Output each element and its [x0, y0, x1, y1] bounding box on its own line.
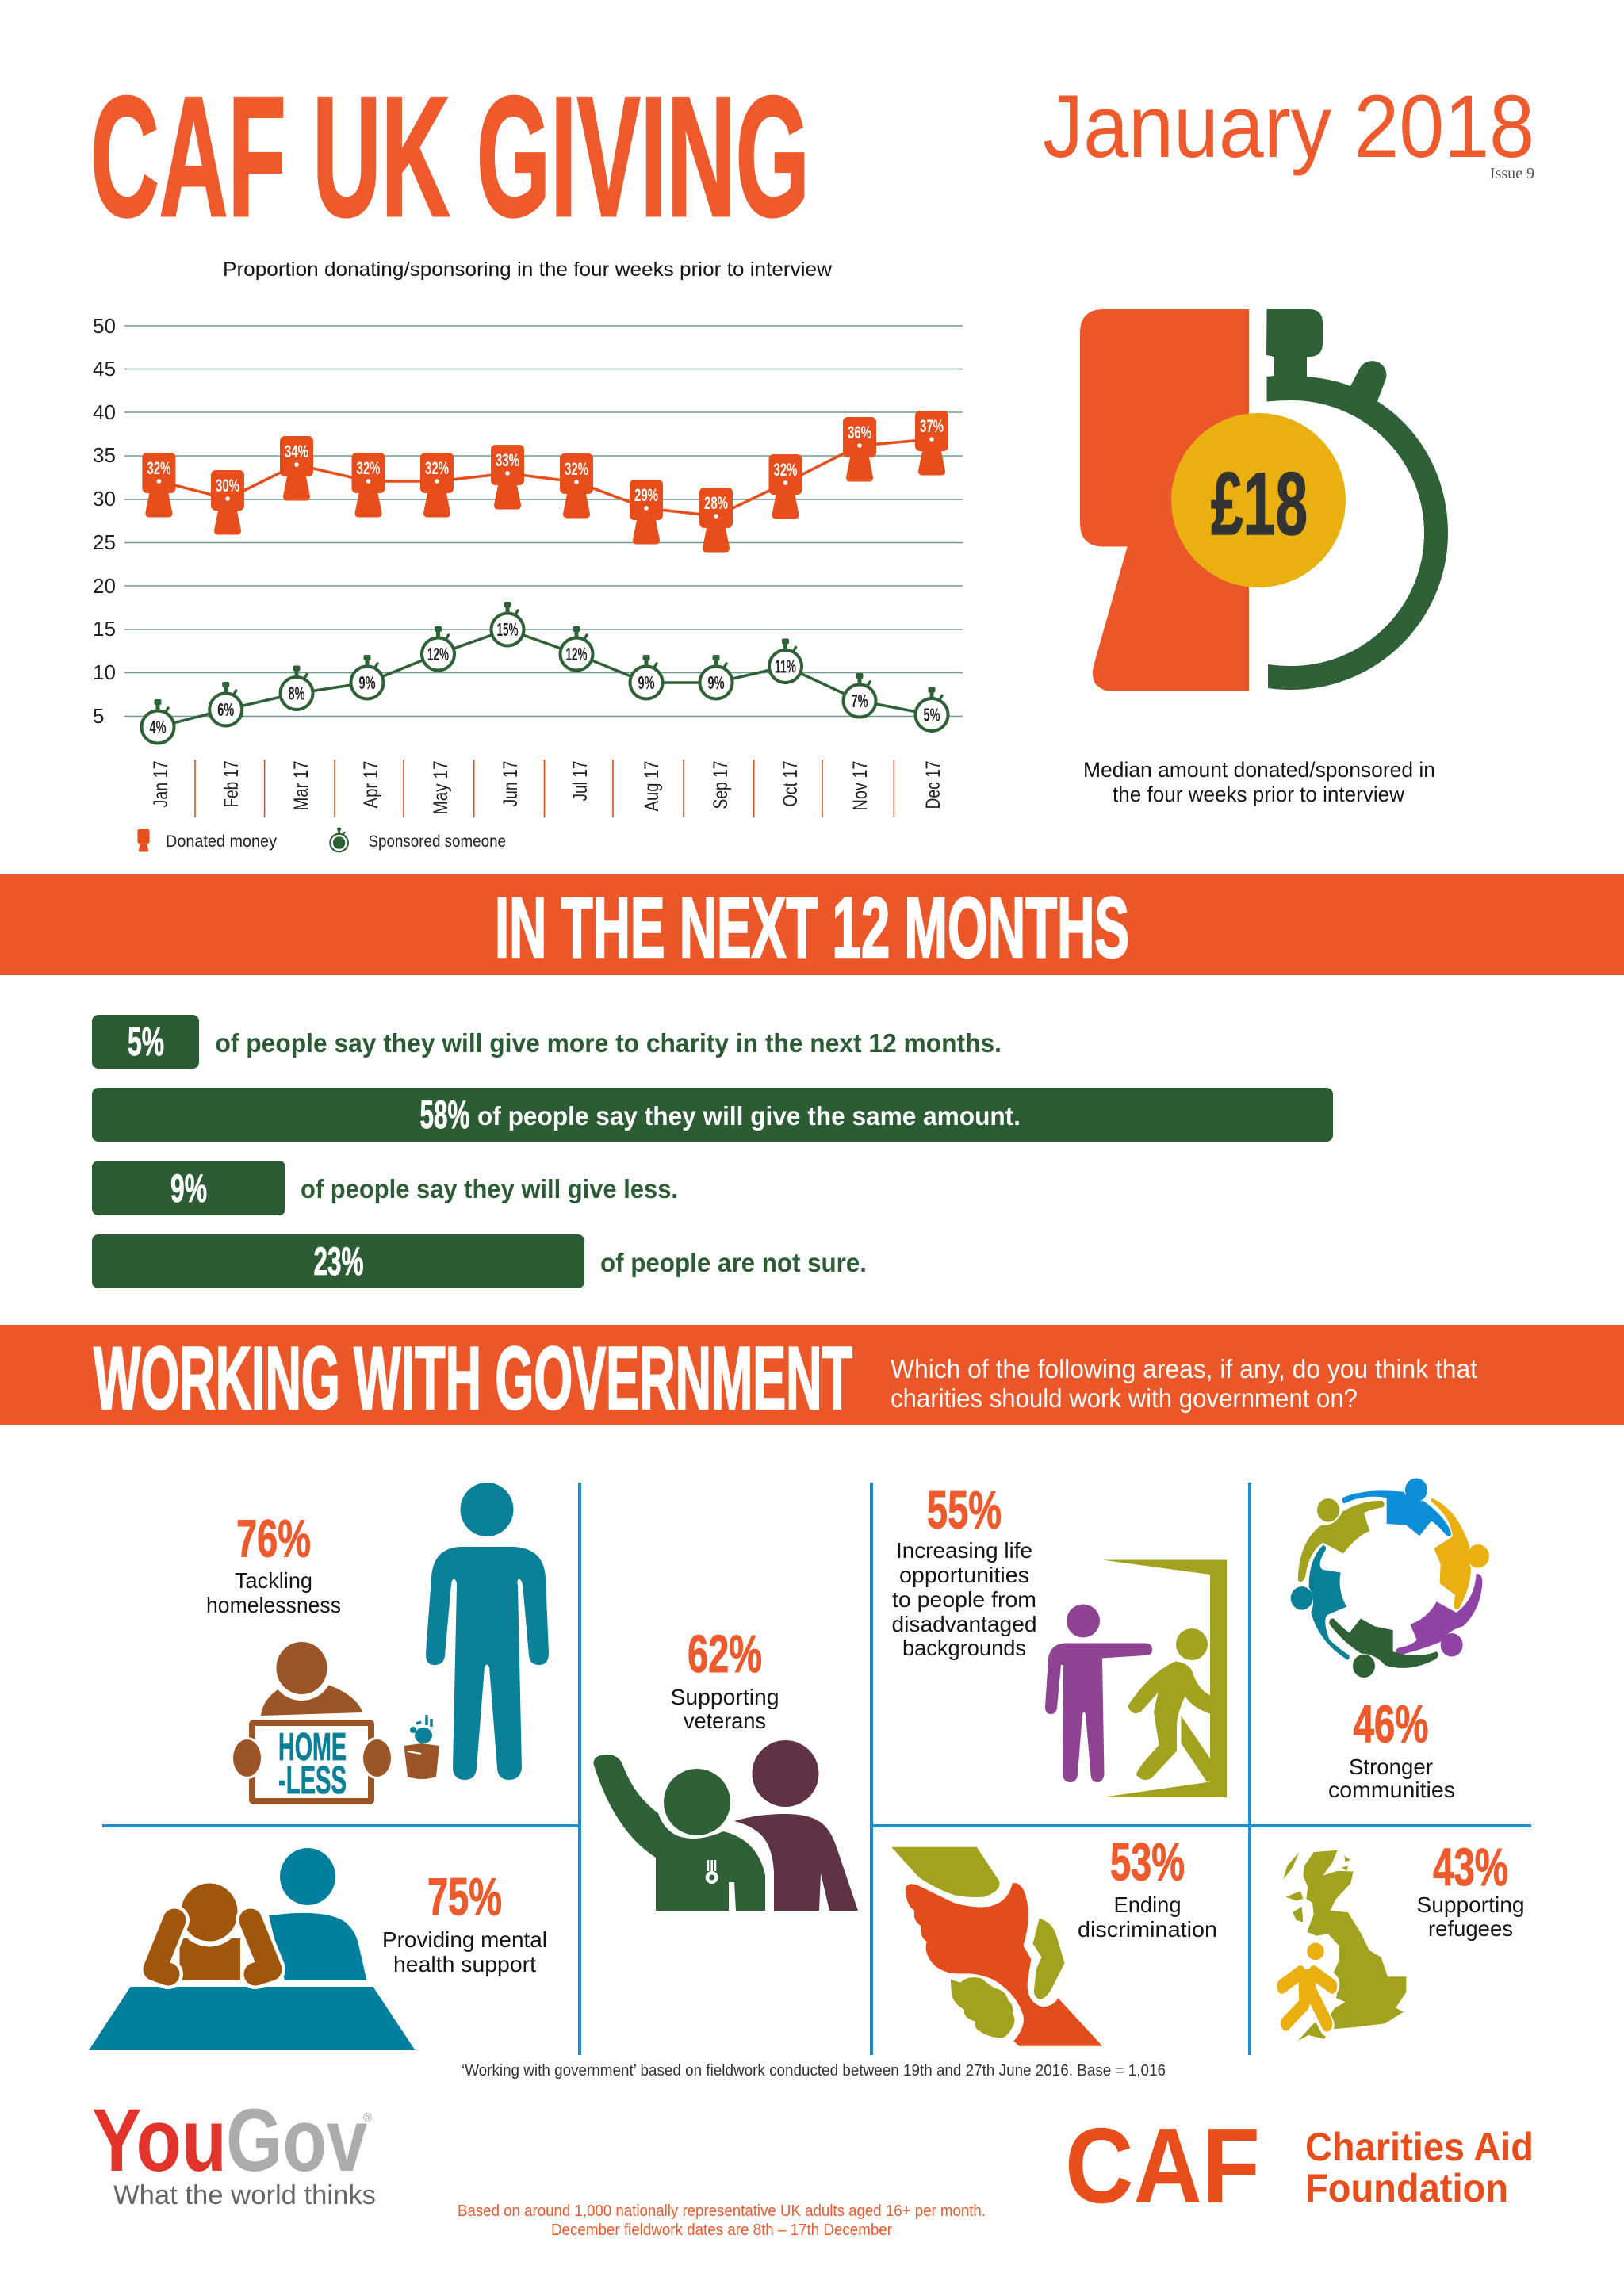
- donated markers: 30%: [216, 476, 239, 496]
- y axis labels: 10: [93, 660, 116, 684]
- label: stronger communities: [1328, 1755, 1455, 1802]
- banner: in the next 12 months: IN THE NEXT 12 MONTHS: [495, 879, 1129, 975]
- stat: 75 percent: 75%: [427, 1868, 502, 1927]
- sample note: December fieldwork dates are 8th – 17th December: [551, 2221, 892, 2239]
- icon: community ring: [1291, 1479, 1489, 1678]
- donated money line: [159, 439, 932, 516]
- stat: 55 percent: 55%: [927, 1481, 1002, 1540]
- logo: CAF: Charities Aid: [1305, 2125, 1534, 2169]
- stat: 43 percent: 43%: [1433, 1838, 1508, 1897]
- month separators and labels: Apr 17: [360, 761, 382, 809]
- bar: 5 percent give more: 5%: [128, 1020, 164, 1064]
- label: increasing life opportunities: disadvantaged: [891, 1612, 1037, 1636]
- label: providing mental health support: [382, 1927, 547, 1976]
- median caption: [1083, 758, 1435, 806]
- bar: 5 percent give more: [92, 1015, 1002, 1069]
- bar: 23 percent not sure: of people are not sure.: [600, 1248, 867, 1277]
- banner: in the next 12 months: [0, 874, 1624, 975]
- banner question: charities should work with government on?: [891, 1383, 1358, 1413]
- sponsored line: [158, 629, 932, 727]
- label: providing mental health support: Providing mental: [382, 1927, 547, 1952]
- donated markers: 36%: [848, 423, 871, 442]
- label: increasing life opportunities: Increasing life: [896, 1538, 1032, 1563]
- icon: homeless person with sign: HOME: [278, 1726, 347, 1769]
- label: supporting veterans: veterans: [684, 1709, 766, 1733]
- sponsored markers: 12%: [566, 644, 587, 664]
- month separators and labels: Jun 17: [500, 761, 522, 807]
- median caption: the four weeks prior to interview: [1113, 783, 1404, 806]
- y axis labels: 20: [93, 574, 116, 598]
- icon: two people at table: [89, 1848, 416, 2050]
- label: supporting refugees: [1416, 1892, 1524, 1941]
- issue number: Issue 9: [1490, 165, 1534, 182]
- sponsored markers: 9%: [707, 672, 725, 693]
- label: increasing life opportunities: opportunities: [899, 1563, 1029, 1587]
- icon: begging cup: [404, 1715, 439, 1779]
- month separators and labels: May 17: [430, 761, 452, 815]
- y axis labels: 5: [93, 704, 104, 728]
- label: supporting refugees: Supporting: [1416, 1892, 1524, 1917]
- sponsored markers: 11%: [775, 656, 796, 677]
- label: tackling homelessness: homelessness: [206, 1593, 341, 1617]
- banner: working with government: WORKING WITH GOVERNMENT: [94, 1329, 852, 1428]
- logo: YouGov: [92, 2091, 376, 2210]
- sponsored markers: [141, 602, 948, 744]
- panel: mental health: [89, 1848, 547, 2050]
- donated markers: 37%: [920, 416, 944, 436]
- donated markers: 32%: [774, 460, 797, 480]
- icon: UK map with person: [1282, 1850, 1406, 2041]
- icon: homeless person with sign: [232, 1639, 392, 1802]
- label: tackling homelessness: Tackling: [235, 1568, 312, 1593]
- panel: veterans: [593, 1624, 858, 1911]
- label: ending discrimination: [1078, 1892, 1217, 1942]
- label: tackling homelessness: [206, 1568, 341, 1617]
- y axis labels: [93, 314, 116, 728]
- sponsored markers: 6%: [217, 699, 234, 720]
- fieldwork note: ‘Working with government’ based on fieldwork conducted between 19th and 27th June 2016. Base = 1,016: [462, 2062, 1166, 2080]
- icon: standing person: [426, 1483, 549, 1780]
- chart heading: Proportion donating/sponsoring in the four weeks prior to interview: [223, 258, 833, 281]
- bar: 9 percent less: [92, 1161, 678, 1215]
- sponsored markers: 4%: [149, 717, 167, 737]
- sponsored markers: 5%: [923, 704, 940, 725]
- icon: homeless person with sign: -LESS: [278, 1759, 347, 1802]
- donated markers: 32%: [425, 458, 449, 478]
- sample note: [458, 2202, 986, 2239]
- y axis labels: 35: [93, 443, 116, 467]
- stat: 53 percent: 53%: [1110, 1833, 1185, 1892]
- banner question: [891, 1354, 1477, 1413]
- logo: YouGov: Gov: [226, 2091, 367, 2190]
- banner question: Which of the following areas, if any, do you think that: [891, 1354, 1477, 1383]
- panel: homelessness: [206, 1483, 549, 1802]
- label: supporting veterans: [671, 1685, 779, 1733]
- sponsored markers: 9%: [638, 672, 655, 693]
- label: stronger communities: Stronger: [1349, 1755, 1433, 1779]
- donated markers: 28%: [704, 493, 728, 513]
- stat: 76 percent: 76%: [236, 1510, 311, 1568]
- label: supporting refugees: refugees: [1428, 1916, 1513, 1941]
- y axis labels: 30: [93, 487, 116, 511]
- label: increasing life opportunities: backgrounds: [902, 1636, 1026, 1660]
- label: providing mental health support: health support: [393, 1952, 536, 1976]
- sponsored markers: 12%: [427, 644, 449, 664]
- sponsored markers: 8%: [289, 683, 304, 704]
- sample note: Based on around 1,000 nationally representative UK adults aged 16+ per month.: [458, 2202, 986, 2220]
- stat: 46 percent: 46%: [1353, 1695, 1429, 1754]
- donated markers: 32%: [357, 458, 380, 478]
- y axis labels: 25: [93, 530, 116, 554]
- line chart: [93, 314, 963, 852]
- legend: Donated money: [166, 832, 277, 851]
- y axis labels: 15: [93, 617, 116, 641]
- month separators and labels: [150, 760, 944, 817]
- label: increasing life opportunities: to people from: [892, 1587, 1036, 1612]
- bar: 5 percent give more: of people say they will give more to charity in the next 12 months.: [216, 1028, 1002, 1058]
- icon: door and walking person: [1102, 1560, 1227, 1797]
- bar: 9 percent less: of people say they will give less.: [301, 1174, 678, 1203]
- month separators and labels: Oct 17: [779, 761, 802, 807]
- bar: 58 percent same: [92, 1088, 1333, 1142]
- icon: median amount money and stopwatch: [1080, 309, 1448, 691]
- month separators and labels: Dec 17: [922, 761, 944, 809]
- logo: YouGov: ®: [363, 2111, 372, 2125]
- month separators and labels: Sep 17: [710, 761, 732, 809]
- logo: CAF: CAF: [1065, 2106, 1260, 2225]
- label: increasing life opportunities: [891, 1538, 1037, 1660]
- month separators and labels: Jan 17: [150, 761, 172, 807]
- sponsored markers: 9%: [358, 672, 376, 693]
- legend: Sponsored someone: [368, 832, 506, 851]
- logo: CAF: Foundation: [1305, 2166, 1508, 2210]
- panel: life opportunities: [891, 1481, 1227, 1797]
- logo: YouGov: You: [92, 2091, 227, 2190]
- icon: hands: [891, 1847, 1102, 2046]
- y axis labels: 45: [93, 357, 116, 381]
- sponsored markers: 15%: [496, 619, 519, 640]
- month separators and labels: Nov 17: [849, 761, 871, 810]
- month separators and labels: Mar 17: [290, 761, 312, 810]
- label: ending discrimination: Ending: [1113, 1892, 1182, 1917]
- donated markers: 33%: [496, 450, 519, 470]
- panel: discrimination: [891, 1833, 1217, 2046]
- month separators and labels: Jul 17: [569, 761, 592, 801]
- panel: stronger communities: [1291, 1479, 1489, 1802]
- date heading: January 2018: [1043, 77, 1534, 176]
- donated markers: 34%: [285, 442, 308, 461]
- month separators and labels: Aug 17: [641, 761, 663, 812]
- median caption: Median amount donated/sponsored in: [1083, 758, 1435, 782]
- logo: CAF: [1065, 2106, 1534, 2225]
- donated markers: 32%: [147, 458, 170, 478]
- logo: YouGov: What the world thinks: [113, 2180, 376, 2210]
- donated markers: 29%: [634, 485, 658, 505]
- donated markers: 32%: [565, 459, 588, 479]
- bar: 58 percent same: 58%: [420, 1093, 469, 1137]
- title: CAF UK GIVING: [90, 60, 810, 252]
- panel: refugees: [1282, 1838, 1524, 2041]
- legend: [137, 828, 506, 852]
- bar: 9 percent less: 9%: [170, 1166, 207, 1211]
- label: stronger communities: communities: [1328, 1777, 1455, 1802]
- y axis labels: 50: [93, 314, 116, 338]
- donated markers: [142, 411, 948, 552]
- stat: 62 percent: 62%: [688, 1624, 762, 1684]
- median value: £18: [1211, 454, 1308, 553]
- label: ending discrimination: discrimination: [1078, 1917, 1217, 1942]
- icon: pointing person: [1045, 1605, 1152, 1782]
- label: supporting veterans: Supporting: [671, 1685, 779, 1709]
- y axis labels: 40: [93, 400, 116, 424]
- sponsored markers: 7%: [852, 691, 868, 711]
- bar: 23 percent not sure: [92, 1234, 867, 1288]
- month separators and labels: Feb 17: [220, 761, 243, 807]
- bar: 23 percent not sure: 23%: [314, 1239, 363, 1284]
- icon: veteran and companion: [593, 1740, 858, 1911]
- bar: 58 percent same: of people say they will give the same amount.: [477, 1101, 1021, 1131]
